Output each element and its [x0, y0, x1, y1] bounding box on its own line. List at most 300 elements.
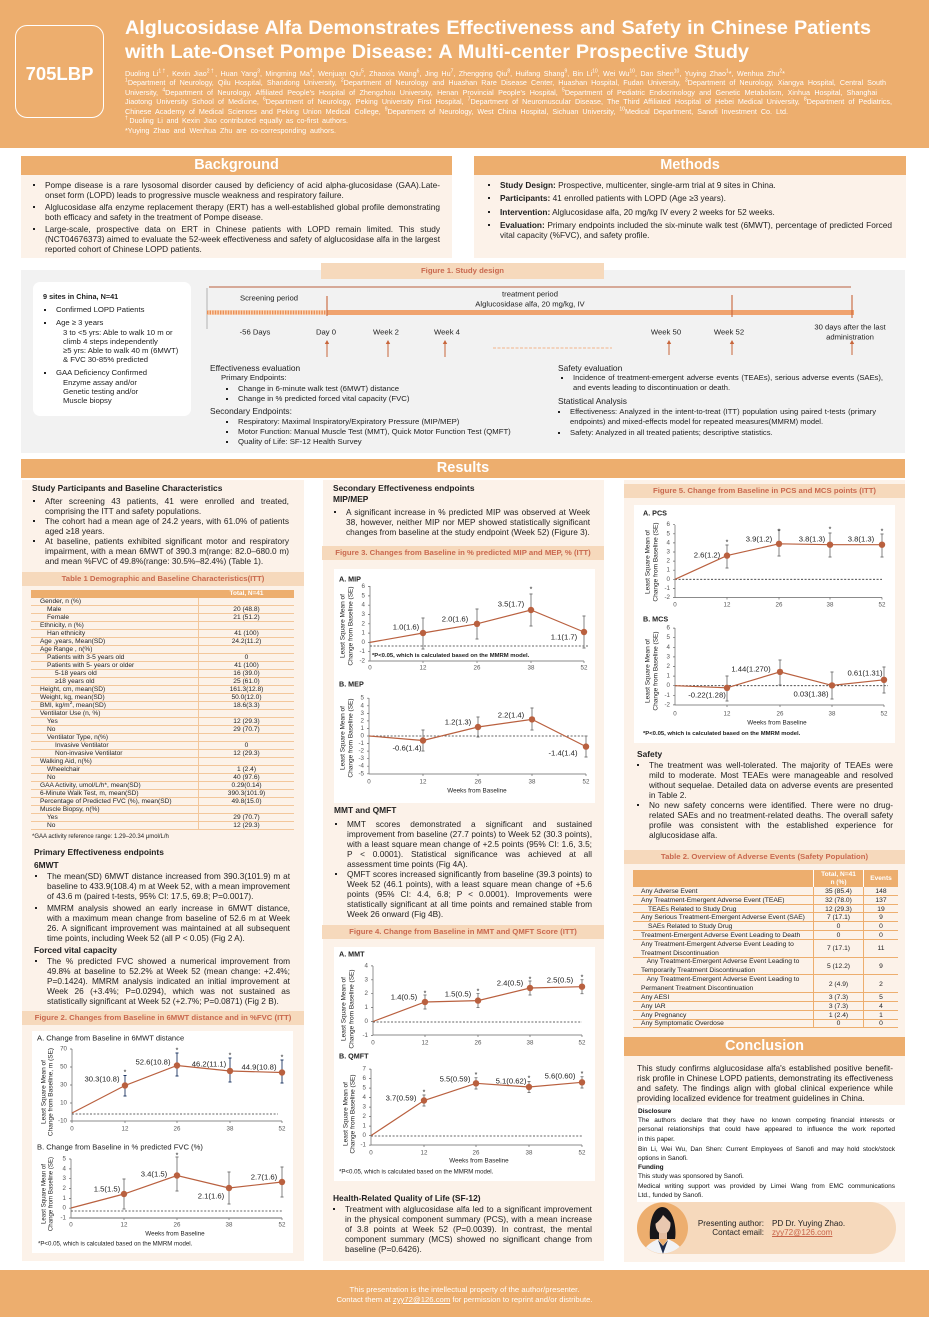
table 1: Gender, n (%) [40, 598, 81, 605]
table 1: No [47, 774, 55, 781]
poster number badge [15, 25, 104, 118]
chart: PCS: 1 [667, 567, 671, 574]
chart: QMFT: 0 [369, 1150, 373, 1156]
chart: MMT: 4 [365, 962, 369, 969]
chart: MCS: 3 [667, 653, 671, 660]
chart: FVC change: *P<0.05, which is calculated based on the MMRM model. [38, 1240, 193, 1248]
chart: FVC change: 2.1(1.6) [198, 1192, 225, 1200]
safety text: without sequelae. Detailed data on adverse events are presented [649, 780, 893, 790]
table 2: Permanent Treatment Discontinuation [641, 985, 753, 992]
inclusion text: climb 4 steps independently [63, 337, 158, 346]
disclosure text: Disclosure [638, 1108, 671, 1115]
chart: QMFT: 5.6(0.60) [545, 1072, 576, 1080]
secondary effectiveness text: A significant increase in % predicted MIP was observed at Week [346, 507, 590, 517]
table 2: Total, N=41 [821, 871, 856, 878]
primary effectiveness text [34, 847, 290, 1006]
background text [33, 180, 440, 254]
table 1: 5-18 years old [55, 670, 97, 677]
chart: MEP: -3 [358, 755, 365, 762]
chart: PCS: * [778, 528, 781, 536]
study participants text: The cohort had a mean age of 24.2 years, with 61.0% of patients [45, 516, 289, 526]
primary effectiveness text: MMRM analysis showed an early increase in 6MWT distance, [47, 903, 290, 913]
study participants text: aged ≥18 years. [45, 526, 104, 536]
chart: MCS: -2 [664, 701, 671, 708]
health-related quality of life text: of 3.8 points at Week 52 (P=0.0039). In contrast, the mental [345, 1224, 592, 1234]
heading: table 2: Table 2. Overview of Adverse Events (Safety Population) [661, 852, 868, 861]
chart: PCS: 5 [667, 530, 671, 537]
panel: background [21, 156, 452, 258]
chart: FVC change: 3 [63, 1175, 67, 1182]
chart: MCS: 0 [667, 682, 671, 689]
chart: MMT: A. MMT [339, 950, 365, 958]
chart: MIP: 1.1(1.7) [551, 632, 578, 642]
chart: QMFT: 1 [363, 1123, 367, 1130]
chart: PCS: 6 [667, 521, 671, 528]
table 1: 18.6(3.3) [233, 702, 260, 709]
heading: table 1 [22, 572, 304, 586]
secondary effectiveness text: changes from baseline at the study endpoint (Week 52) (Figure 3). [346, 527, 590, 537]
background text: Large-scale, prospective data on ERT in Chinese patients with LOPD remain limited. This study [45, 224, 440, 234]
effectiveness evaluation text: Respiratory: Maximal Inspiratory/Expiratory Pressure (MIP/MEP) [238, 417, 459, 426]
disclosure and funding [637, 1105, 905, 1202]
secondary effectiveness text: MIP/MEP [333, 494, 368, 504]
table 2: 9 [879, 914, 883, 921]
heading: conclusion [624, 1037, 905, 1056]
background text: (NCT04676373) aimed to evaluate the 52-week effectiveness and safety of alglucosidase alfa in the largest [45, 234, 440, 244]
chart: QMFT: Weeks from Baseline [449, 1158, 509, 1164]
chart: QMFT: *P<0.05, which is calculated based on the MMRM model. [339, 1168, 494, 1176]
table 1: Walking Aid, n(%) [40, 758, 92, 765]
title: with Late-Onset Pompe Disease: A Multi-center Prospective Study [125, 40, 749, 62]
chart: MIP [339, 574, 588, 672]
chart: FVC change: 1.5(1.5) [94, 1184, 121, 1194]
heading: figure 4: Figure 4. Change from Baseline in MMT and QMFT Score (ITT) [349, 927, 577, 936]
chart: MCS: 12 [724, 710, 731, 718]
table 1: Patients with 3-5 years old [47, 654, 124, 661]
table 1: Female [47, 614, 69, 621]
safety text: profile was consistent with the established experience for [649, 820, 893, 830]
background text: both efficacy and safety in the treatment of Pompe disease. [45, 212, 263, 222]
table 1: BMI, kg/m2, mean(SD) [40, 700, 106, 709]
chart: FVC change: 12 [121, 1222, 128, 1228]
authors and affiliations: 1Department of Neurology, Qilu Hospital, Shandong University, 2Department of Neurology and Huashan Rare Disease Center, Huashan Hospital, Fudan University, 3Department of Neurology, Xiangya Hospital, Central South [125, 78, 886, 87]
chart: MIP: 0 [368, 664, 372, 672]
chart: FVC change: Change from Baseline (SE) [48, 1157, 54, 1231]
methods text: Study Design: Prospective, multicenter, single-arm trial at 9 sites in China. [500, 180, 776, 190]
presenting author pill [637, 1202, 896, 1254]
authors and affiliations: Jiaotong University School of Medicine, 6Department of Neurology, Peking University First Hospital, 7Department of Neuromuscular Disease, The Third Affiliated Hospital of Hebei Medical University, 8Department of Pediatrics, [125, 96, 892, 106]
table 2: TEAEs Related to Study Drug [648, 906, 736, 912]
study timeline [206, 286, 887, 357]
table 2: Events [870, 875, 892, 882]
table 1: 29 (70.7) [233, 814, 260, 821]
chart: QMFT: 5.1(0.62) [496, 1076, 527, 1086]
study timeline: Week 4 [434, 328, 461, 336]
presenter details: Presenting author: [698, 1219, 764, 1228]
chart: MMT: 1 [365, 1004, 369, 1011]
chart: QMFT: 6 [363, 1075, 367, 1082]
panel: study design background [21, 270, 905, 453]
table 2: 5 (12.2) [827, 963, 850, 970]
chart: MMT: * [477, 988, 480, 996]
chart: QMFT: * [475, 1072, 478, 1079]
chart: MEP: 2.2(1.4) [498, 710, 525, 720]
chart: 6MWT change: * [281, 1054, 284, 1062]
table 2 [633, 870, 898, 1028]
table 1: 1 (2.4) [237, 766, 256, 773]
inclusion text: Confirmed LOPD Patients [56, 305, 144, 314]
effectiveness evaluation text: Primary Endpoints: [221, 373, 286, 382]
chart: FVC change [37, 1142, 286, 1248]
table 2: 0 [879, 932, 883, 939]
conclusion text: providing localized evidence for treatment guidelines in China. [637, 1093, 865, 1103]
table 1: 12 (29.3) [233, 750, 260, 757]
table 1: Weight, kg, mean(SD) [40, 694, 105, 701]
authors and affiliations: Duoling Li1†, Kexin Jiao2†, Huan Yang3, Mingming Ma4, Wenjuan Qiu5, Zhaoxia Wang6, Jing Hu7, Zhengqing Qiu8, Huifang Shang9, Bin Li10, Wei Wu10, Dan Shen10, Yuying Zhao1*, Wenhua Zhu2* [125, 69, 785, 78]
disclosure text: options in Sanofi. [638, 1155, 688, 1162]
primary effectiveness text: P=0.1424). MMRM analysis indicated an initial improvement at [47, 976, 290, 986]
table 2: Any Treatment-Emergent Adverse Event Leading to [647, 958, 799, 965]
chart: 6MWT change: 38 [227, 1126, 234, 1132]
table 1: 0 [245, 742, 248, 749]
chart: PCS: 2.6(1.2) [694, 550, 721, 560]
chart: 6MWT change: 46.2(11.1) [192, 1060, 227, 1068]
chart: 6MWT change: 30.3(10.8) [84, 1074, 120, 1084]
study timeline: administration [826, 332, 874, 342]
chart: MIP: Least Square Mean of [340, 594, 346, 658]
MMT and QMFT text: with a least square mean change of +2.5 points (95% CI: 1.6, 3.5; [347, 839, 592, 849]
chart: MEP: -2 [358, 748, 365, 755]
table 1: Ventilator Use (n, %) [40, 710, 100, 717]
panel: middle results column [323, 480, 604, 1261]
disclosure text: personal relationships that could have appeared to influence the work reported [638, 1126, 895, 1133]
table 1: 6-Minute Walk Test, m, mean(SD) [40, 790, 139, 797]
chart: MMT: Change from Baseline (SE) [348, 969, 356, 1049]
study participants text: At baseline, patients exhibited significant motor and respiratory [45, 536, 289, 546]
chart: MMT [339, 950, 586, 1049]
chart: MIP: 2.0(1.6) [442, 614, 469, 624]
heading: figure 4 [322, 925, 604, 939]
table 1: 20 (48.8) [233, 606, 260, 613]
table 1: Yes [47, 718, 58, 725]
study participants text: and mean %FVC of 49.8%(range: 30.5%–82.4%) (Table 1). [45, 556, 263, 566]
table 2: 3 (7.3) [829, 1003, 848, 1010]
chart: PCS: 3.9(1.2) [746, 534, 773, 544]
chart: QMFT: * [423, 1090, 426, 1096]
chart: MCS: 26 [777, 710, 784, 718]
inclusion text: GAA Deficiency Confirmed [56, 368, 147, 377]
chart: MCS: 1.44(1.270) [731, 664, 771, 674]
chart: QMFT: 4 [363, 1094, 367, 1101]
figure 5 charts [634, 505, 895, 743]
heading: table 2 [624, 850, 905, 864]
chart: PCS: 4 [667, 539, 671, 546]
chart: PCS: 3.8(1.3) [799, 534, 826, 544]
chart: QMFT: 5 [363, 1085, 367, 1092]
MMT and QMFT text: MMT and QMFT [334, 805, 396, 815]
conclusion text: and safety. The findings align with global clinical experience while [637, 1083, 893, 1093]
safety text: in Table 2. [649, 790, 687, 800]
table 1: Invasive Ventilator [55, 742, 109, 749]
chart: QMFT: 26 [473, 1150, 480, 1156]
disclosure text: Ltd., funded by Sanofi. [638, 1192, 703, 1199]
chart: MMT: Least Square Mean of [340, 977, 348, 1041]
portrait illustration [637, 1202, 688, 1254]
conclusion text: This study confirms alglucosidase alfa's established positive benefit- [637, 1063, 893, 1073]
figure 3 charts [334, 569, 595, 803]
chart: QMFT [339, 1052, 586, 1176]
chart: MEP: 1 [361, 725, 365, 732]
table 2: 9 [879, 963, 883, 970]
chart: MMT: 0 [371, 1040, 375, 1046]
inclusion text: Muscle biopsy [63, 396, 112, 405]
chart: MEP: 26 [475, 778, 482, 786]
chart: MIP: 3 [362, 611, 366, 618]
study timeline: Day 0 [316, 328, 336, 336]
effectiveness evaluation text: Effectiveness evaluation [210, 363, 300, 373]
chart: 6MWT change: 52 [279, 1126, 286, 1132]
chart: MEP: -0.6(1.4) [392, 744, 422, 752]
effectiveness evaluation text: Secondary Endpoints: [210, 406, 292, 416]
primary effectiveness text: baseline to 433.9(108.4) m at Week 52, with a mean improvement [47, 881, 290, 891]
chart: MMT: * [581, 974, 584, 982]
table 2: Any Treatment-Emergent Adverse Event (TEAE) [641, 897, 784, 904]
chart: FVC change: 1 [63, 1195, 67, 1202]
title [125, 17, 871, 62]
poster number badge: 705LBP [26, 63, 93, 84]
disclosure text [638, 1108, 895, 1199]
chart: MEP: 0 [361, 732, 365, 740]
chart: MIP: 38 [528, 664, 535, 672]
chart: QMFT: * [581, 1071, 584, 1078]
chart: 6MWT change: A. Change from Baseline in 6MWT distance [37, 1034, 184, 1042]
primary effectiveness text: 6MWT [34, 860, 59, 870]
chart: PCS: * [829, 526, 832, 534]
chart: MMT: * [529, 976, 532, 984]
table 1: 50.0(12.0) [231, 694, 262, 701]
heading: results [21, 459, 905, 478]
chart: QMFT: 52 [579, 1150, 586, 1156]
chart: FVC change: 4 [63, 1165, 67, 1172]
chart: MEP: -1.4(1.4) [548, 748, 578, 758]
safety evaluation and statistics text: Effectiveness: Analyzed in the intent-to-treat (ITT) population using paired t-tests (primary [570, 407, 876, 416]
chart: 6MWT change: 50 [60, 1064, 68, 1070]
chart: MMT: 1.5(0.5) [445, 990, 472, 998]
chart: FVC change: 5 [63, 1156, 67, 1162]
table 1 [31, 590, 294, 830]
inclusion text: & FVC 30-85% predicted [63, 355, 148, 364]
effectiveness evaluation text: Quality of Life: SF-12 Health Survey [238, 437, 362, 446]
chart: FVC change: 3.4(1.5) [141, 1170, 168, 1178]
table 2: 0 [879, 1020, 883, 1027]
conclusion text [637, 1063, 893, 1103]
table 1: Age Range , n(%) [40, 646, 92, 653]
health-related quality of life text: component summary (MCS) showed no significant change from [345, 1234, 592, 1244]
inclusion text: ≥5 yrs: Able to walk 40 m (6MWT) [63, 346, 178, 355]
heading: figure 5 [624, 484, 905, 498]
chart: FVC change: B. Change from Baseline in % predicted FVC (%) [37, 1142, 203, 1152]
chart: MIP: 4 [362, 602, 366, 609]
chart: MEP: 4 [361, 702, 365, 709]
table 2: Any Treatment-Emergent Adverse Event Leading to [647, 976, 799, 983]
presenter details [698, 1219, 845, 1237]
chart: QMFT: Least Square Mean of [342, 1082, 350, 1146]
chart: QMFT: 3 [363, 1104, 367, 1111]
study timeline: Week 52 [714, 328, 744, 336]
table 1: 12 (29.3) [233, 718, 260, 725]
heading: background [21, 156, 452, 175]
chart: PCS: * [726, 540, 729, 546]
chart: MIP: 3.5(1.7) [498, 600, 525, 608]
chart: MCS: *P<0.05, which is calculated based on the MMRM model. [643, 731, 801, 737]
chart: 6MWT change: * [229, 1052, 232, 1060]
health-related quality of life text: Health-Related Quality of Life (SF-12) [333, 1193, 481, 1203]
table 1: 49.8(15.0) [231, 798, 262, 805]
primary effectiveness text: of 43.6 m (paired t-tests, 95% CI: 17.5, 69.8; P=0.0017). [47, 891, 253, 901]
table 1: Yes [47, 814, 58, 821]
disclosure text: This study was sponsored by Sanofi. [638, 1173, 744, 1180]
table 2: 137 [875, 897, 887, 904]
table 1: Male [47, 606, 61, 613]
disclosure text: The authors declare that they have no known competing financial interests or [638, 1117, 895, 1124]
table 2: SAEs Related to Study Drug [648, 923, 732, 930]
chart: MIP: Change from Baseline (SE) [348, 586, 354, 666]
table 2: Any Serious Treatment-Emergent Adverse Event (SAE) [641, 914, 805, 921]
chart: MEP: Least Square Mean of [340, 706, 346, 770]
table 2: 11 [878, 945, 884, 952]
chart: MIP: -2 [359, 658, 366, 664]
chart: FVC change: 26 [174, 1222, 181, 1228]
table 1: Patients with 5- years or older [47, 662, 134, 669]
chart: MEP: -5 [358, 770, 365, 777]
table 2: 5 [879, 994, 883, 1001]
chart: PCS: 2 [667, 558, 671, 565]
chart: MCS: 5 [667, 634, 671, 641]
chart: QMFT: * [528, 1076, 531, 1082]
study timeline: Alglucosidase alfa, 20 mg/kg, IV [475, 300, 586, 308]
secondary effectiveness text [333, 483, 590, 537]
table 1 footnote: *GAA activity reference range: 1.29–20.34 μmol/L/h [32, 834, 169, 840]
presenter details: zyy72@126.com [772, 1228, 832, 1237]
health-related quality of life text: Treatment with alglucosidase alfa led to a significant improvement [345, 1204, 592, 1214]
chart: PCS: Least Square Mean of [644, 530, 652, 594]
MMT and QMFT text: Week 26 onward (Fig 4B). [347, 909, 443, 919]
chart: MEP: Weeks from Baseline [447, 788, 507, 794]
table 1: ≥18 years old [55, 678, 95, 685]
safety text: No new safety concerns were identified. There were no drug- [649, 800, 893, 810]
figure 2 charts [32, 1031, 293, 1253]
chart: MIP: *P<0.05, which is calculated based on the MMRM model. [372, 653, 530, 659]
chart: PCS: Change from Baseline (SE) [652, 522, 660, 602]
methods text: Participants: 41 enrolled patients with LOPD (Age ≥3 years). [500, 193, 726, 203]
chart: MMT: 38 [527, 1040, 534, 1046]
table 2: 35 (85.4) [825, 888, 852, 895]
table 1: 41 (100) [234, 630, 259, 637]
table 2: 12 (29.3) [825, 906, 852, 912]
chart: MEP [339, 680, 590, 794]
presenter details: PD Dr. Yuying Zhao. [772, 1219, 845, 1228]
heading: figure 3: Figure 3. Changes from Baseline in % predicted MIP and MEP, % (ITT) [335, 548, 591, 557]
footer: Contact them at zyy72@126.com for permission to reprint and/or distribute. [336, 1295, 593, 1304]
chart: MEP: -4 [358, 763, 365, 770]
table 1: 12 (29.3) [233, 822, 260, 829]
chart: QMFT: 38 [526, 1150, 533, 1156]
chart: MCS: 4 [667, 644, 671, 651]
chart: FVC change: 2.7(1.6) [251, 1172, 278, 1182]
primary effectiveness text: time points, including Week 52 (all P < 0.05) (Fig 2 A). [47, 933, 245, 943]
chart: 6MWT change: 30 [60, 1082, 68, 1088]
safety evaluation and statistics text: Incidence of treatment-emergent adverse events (TEAEs), serious adverse events (SAEs), [573, 373, 883, 382]
chart: PCS: * [881, 528, 884, 536]
chart: MMT: 2 [365, 990, 369, 997]
chart: MEP: 3 [361, 710, 365, 717]
table 1: Age ,years, Mean(SD) [40, 638, 105, 645]
table 1: Ethnicity, n (%) [40, 622, 84, 629]
chart: PCS: A. PCS [643, 508, 667, 518]
study participants text [32, 483, 289, 566]
chart: FVC change: -1 [60, 1214, 67, 1222]
table 2: Any AESI [641, 994, 669, 1001]
MMT and QMFT text: statistically significant at all time points and remained stable from [347, 899, 592, 909]
chart: MIP: 12 [420, 664, 427, 672]
chart: 6MWT change: -10 [58, 1118, 68, 1124]
heading: conclusion: Conclusion [725, 1038, 804, 1054]
background text: Pompe disease is a rare lysosomal disorder caused by deficiency of acid alpha-glucosidase (GAA).Late- [45, 180, 440, 190]
table 2: 19 [877, 906, 885, 912]
chart: PCS: -2 [664, 594, 671, 601]
MMT and QMFT text: MMT scores demonstrated a significant and sustained [347, 819, 592, 829]
effectiveness evaluation text: Change in 6-minute walk test (6MWT) distance [238, 384, 399, 393]
authors and affiliations: *Yuying Zhao and Wenhua Zhu are co-corresponding authors. [125, 126, 336, 135]
chart: MEP: 38 [529, 778, 536, 786]
chart: MEP: B. MEP [339, 680, 364, 688]
chart: MIP: 1.0(1.6) [393, 622, 420, 632]
chart: MEP: 12 [420, 778, 427, 786]
chart: FVC change: 2 [63, 1185, 67, 1192]
chart: FVC change: Least Square Mean of [40, 1164, 48, 1224]
chart: QMFT: 2 [363, 1113, 367, 1120]
chart: MMT: 1.4(0.5) [391, 992, 418, 1002]
chart: 6MWT change: 52.6(10.8) [135, 1058, 171, 1066]
authors and affiliations [125, 68, 892, 135]
chart: 6MWT change: * [124, 1070, 127, 1076]
inclusion text: Enzyme assay and/or [63, 378, 137, 387]
chart: PCS: -1 [664, 585, 671, 592]
safety text: Safety [637, 749, 662, 759]
secondary effectiveness text: 38, however, neither MIP nor MEP showed statistically significant [346, 517, 590, 527]
chart: 6MWT change: Change from Baseline, m (SE) [48, 1048, 54, 1136]
chart: 6MWT change: * [176, 1048, 179, 1054]
table 1: Height, cm, mean(SD) [40, 686, 105, 693]
chart: 6MWT change: 26 [174, 1126, 181, 1132]
chart: QMFT: 7 [363, 1066, 367, 1073]
table 2: 1 (2.4) [829, 1012, 848, 1019]
chart: 6MWT change: 10 [60, 1100, 68, 1106]
chart: MMT: 52 [579, 1040, 586, 1046]
study participants text: comprising the ITT and safety populations. [45, 506, 201, 516]
table 2: 2 (4.9) [829, 981, 848, 988]
heading: figure 3 [322, 546, 604, 560]
chart: MCS: Weeks from Baseline [747, 720, 807, 726]
chart: PCS: 3.8(1.3) [848, 534, 875, 544]
chart: MEP: -1 [358, 740, 365, 747]
table 2: Temporarily Treatment Discontinuation [641, 967, 755, 974]
heading: results: Results [437, 460, 489, 476]
secondary effectiveness text: Secondary Effectiveness endpoints [333, 483, 474, 493]
chart: MMT: 12 [422, 1040, 429, 1046]
table 2: 32 (78.0) [825, 897, 852, 904]
chart: MMT: 0 [365, 1018, 369, 1025]
